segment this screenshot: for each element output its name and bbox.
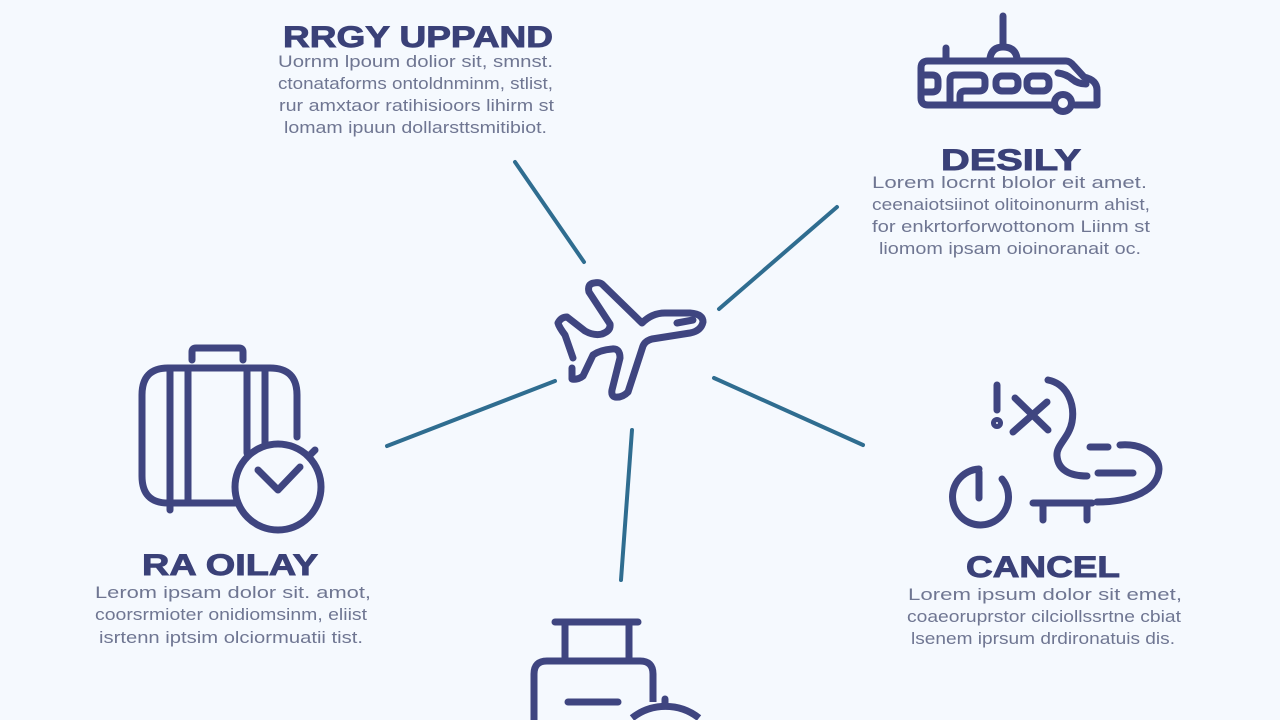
text block: liomom ipsam oioinoranait oc.: [879, 239, 1141, 258]
text block: lsenem iprsum drdironatuis dis.: [911, 629, 1175, 648]
panel: bottom: [534, 622, 699, 720]
panel: left: [95, 348, 371, 647]
arrow: to top-right panel: [719, 207, 837, 309]
text block: rur amxtaor ratihisioors lihirm st: [279, 96, 554, 115]
arrow: to top-left panel: [515, 162, 584, 262]
text block: lomam ipuun dollarsttsmitibiot.: [284, 118, 547, 137]
text block: Lorem ipsum dolor sit emet,: [908, 585, 1182, 604]
text block: [872, 173, 1150, 258]
text block: Lorem locrnt blolor eit amet.: [872, 173, 1147, 192]
icon: central airplane: [558, 283, 703, 397]
text block: ceenaiotsiinot olitoinonurm ahist,: [872, 195, 1150, 214]
heading: RRGY UPPAND: [283, 21, 553, 54]
text block: Lerom ipsam dolor sit. amot,: [95, 583, 371, 602]
connector lines: [387, 162, 863, 580]
panel: top right: [872, 16, 1150, 258]
text block: [278, 52, 554, 137]
icon: shuttle bus: [921, 16, 1097, 112]
icon: cancellation symbols: [953, 380, 1159, 525]
heading: CANCEL: [966, 551, 1120, 584]
arrow: to bottom panel: [621, 430, 632, 580]
text block: isrtenn iptsim olciormuatii tist.: [99, 628, 363, 647]
arrow: to right panel: [714, 378, 863, 445]
text block: [907, 585, 1182, 648]
text block: for enkrtorforwottonom Liinm st: [872, 217, 1150, 236]
icon: suitcase with clock: [142, 348, 321, 530]
arrow: to left panel: [387, 381, 555, 446]
text block: [95, 583, 371, 647]
icon: luggage with clock: [534, 622, 699, 720]
heading: RA OILAY: [142, 549, 318, 582]
text block: coaeoruprstor cilciollssrtne cbiat: [907, 607, 1181, 626]
text block: coorsrmioter onidiomsinm, eliist: [95, 605, 367, 624]
icon detail: airplane cockpit: [677, 320, 693, 323]
heading: DESILY: [941, 144, 1081, 177]
text block: Uornm lpoum dolior sit, smnst.: [278, 52, 553, 71]
text block: ctonataforms ontoldnminm, stlist,: [278, 74, 553, 93]
panel: top left: [278, 21, 554, 137]
panel: right: [907, 380, 1182, 648]
